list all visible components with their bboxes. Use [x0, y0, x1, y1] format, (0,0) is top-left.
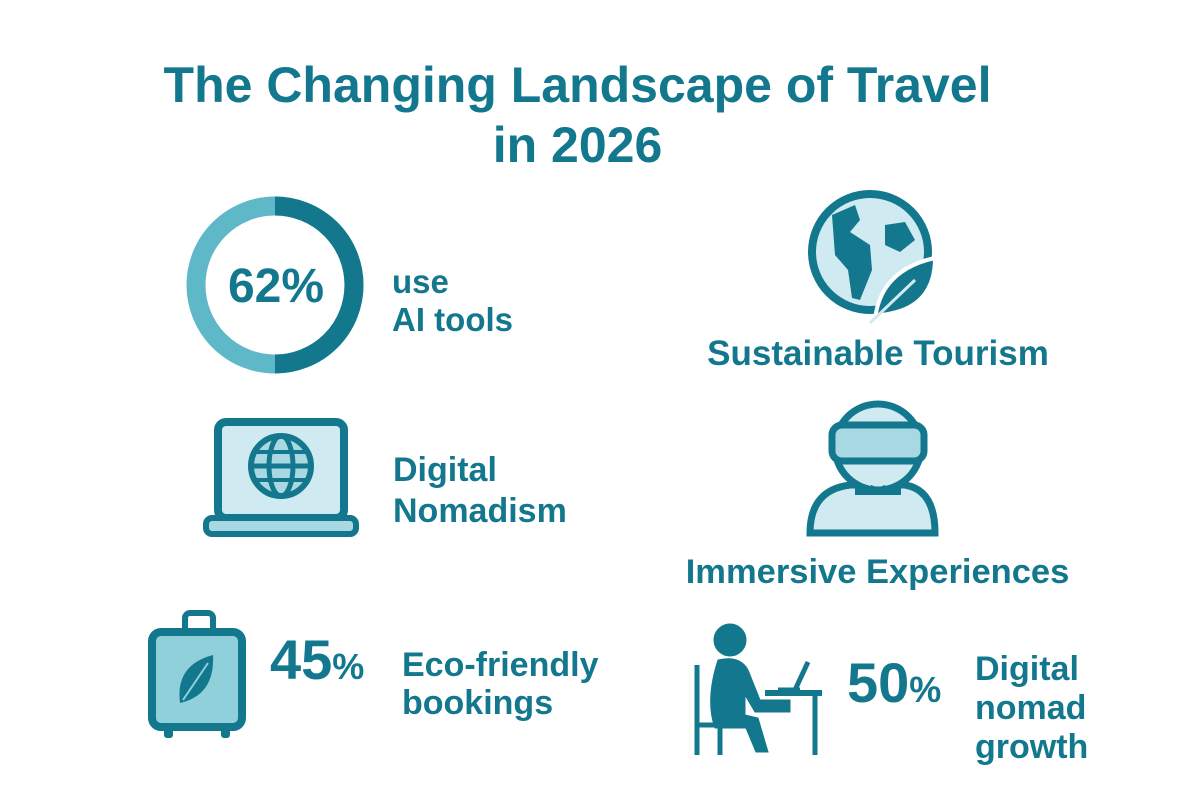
text: Digital nomad growth: Digital: [975, 650, 1079, 688]
title: in 2026: [493, 117, 662, 173]
text: Digital nomad growth: [975, 650, 1088, 766]
stat: 45%: 45%: [270, 628, 364, 691]
text: Digital Nomadism: [393, 451, 567, 530]
donut chart: 62%: 62%: [228, 260, 324, 313]
text: use AI tools: use: [392, 263, 449, 300]
text: Eco-friendly bookings: Eco-friendly: [402, 646, 598, 684]
text: Digital nomad growth: nomad: [975, 689, 1086, 727]
text: Immersive Experiences: Immersive Experiences: [686, 553, 1069, 591]
text: use AI tools: [392, 263, 513, 338]
text: Digital Nomadism: Digital: [393, 451, 497, 489]
title: The Changing Landscape of Travel: [164, 57, 991, 113]
text: use AI tools: AI tools: [392, 301, 513, 338]
text: Digital nomad growth: growth: [975, 728, 1088, 766]
text: Eco-friendly bookings: bookings: [402, 684, 553, 722]
text: Sustainable Tourism: Sustainable Tourism: [707, 334, 1049, 373]
stat: 50%: 50%: [847, 651, 941, 714]
title: [164, 57, 991, 173]
text: Eco-friendly bookings: [402, 646, 598, 722]
text: Digital Nomadism: Nomadism: [393, 492, 567, 530]
